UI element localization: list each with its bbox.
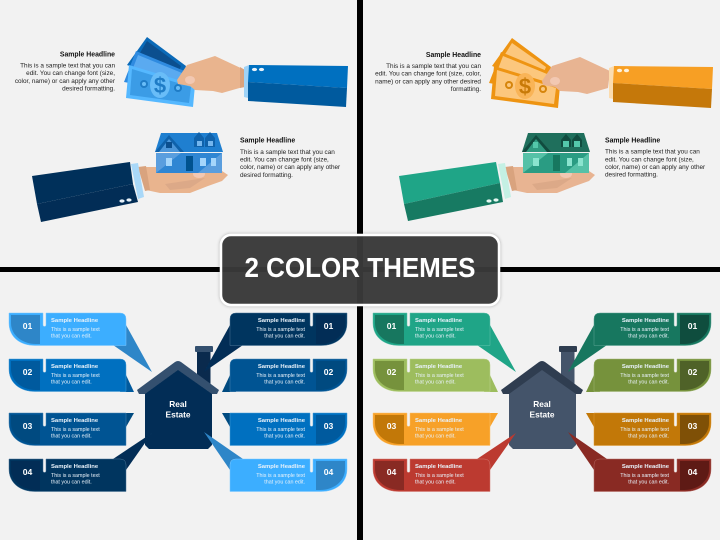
callout: red left 04: 04: [387, 467, 396, 477]
callout: dark green right 01: 01: [688, 321, 697, 331]
callout: orange left 03: This is a sample text: [415, 427, 464, 433]
callout: blue right 02: 02: [324, 367, 333, 377]
text block: blue house headline: color, name) or can apply any other: [240, 164, 341, 171]
diagram: blue real estate house: [137, 346, 219, 449]
text block: blue money headline: [15, 52, 116, 92]
callout: orange left 03: Sample Headline: [415, 418, 463, 424]
callout: light green left 02: Sample Headline: [415, 364, 463, 370]
text block: orange money headline: Sample Headline: [426, 52, 481, 59]
callout: blue left 02: This is a sample text: [51, 373, 100, 379]
callout: blue left 04: Sample Headline: [51, 464, 99, 470]
text block: blue money headline: edit. You can change font (size,: [26, 70, 115, 77]
callout: dark orange right 03: that you can edit.: [628, 434, 669, 440]
callout: dark green right 01: Sample Headline: [622, 318, 670, 324]
callout: blue left 02: that you can edit.: [51, 380, 92, 386]
text block: blue money headline: This is a sample text that you can: [20, 62, 115, 70]
callout: blue left 03: [9, 413, 134, 446]
callout: blue left 03: This is a sample text: [51, 427, 100, 433]
callout: orange left 03: 03: [387, 421, 396, 431]
callout: olive right 02: This is a sample text: [620, 373, 670, 379]
text block: green house headline: [605, 138, 706, 179]
icon: blue hand holding house: [32, 132, 228, 222]
callout: orange left 03: [373, 413, 498, 446]
diagram: blue real estate house: Real: [169, 399, 187, 409]
callout: green left 01: 01: [387, 321, 396, 331]
callout: olive right 02: 02: [688, 367, 697, 377]
callout: green left 01: [373, 313, 516, 372]
text block: orange money headline: [375, 52, 481, 93]
callout: dark green right 01: This is a sample text: [620, 327, 670, 333]
callout: dark orange right 03: 03: [688, 421, 697, 431]
callout: olive right 02: [586, 359, 711, 392]
text block: blue house headline: desired formatting.: [240, 172, 293, 179]
callout: dark red right 04: Sample Headline: [622, 464, 670, 470]
callout: blue left 04: 04: [23, 467, 32, 477]
diagram: multicolor real estate house: Real: [533, 399, 551, 409]
callout: blue left 02: 02: [23, 367, 32, 377]
text block: green house headline: desired formatting.: [605, 172, 658, 179]
callout: green left 01: This is a sample text: [415, 327, 464, 333]
callout: green left 01: Sample Headline: [415, 318, 463, 324]
callout: blue left 02: Sample Headline: [51, 364, 99, 370]
callout: blue right 04: Sample Headline: [258, 464, 306, 470]
text block: orange money headline: formatting.: [451, 86, 481, 93]
callout: blue left 03: Sample Headline: [51, 418, 99, 424]
callout: blue left 04: This is a sample text: [51, 473, 100, 479]
callout: blue right 02: that you can edit.: [264, 380, 305, 386]
callout: dark green right 01: that you can edit.: [628, 334, 669, 340]
text block: blue house headline: edit. You can change font (size,: [240, 156, 329, 164]
callout: blue left 01: This is a sample text: [51, 327, 100, 333]
icon: blue hand giving money: $: [154, 73, 166, 98]
callout: blue right 01: [204, 313, 347, 372]
callout: blue left 02: [9, 359, 134, 392]
callout: dark green right 01: [568, 313, 711, 372]
callout: dark red right 04: [568, 432, 711, 492]
callout: light green left 02: This is a sample text: [415, 373, 464, 379]
callout: blue left 03: that you can edit.: [51, 434, 92, 440]
callout: dark orange right 03: [586, 413, 711, 446]
callout: red left 04: that you can edit.: [415, 480, 456, 486]
callout: blue right 04: 04: [324, 467, 333, 477]
banner: 2 color themes: 2 COLOR THEMES: [244, 252, 476, 283]
callout: dark red right 04: 04: [688, 467, 697, 477]
callout: green left 01: that you can edit.: [415, 334, 456, 340]
callout: blue right 03: This is a sample text: [256, 427, 306, 433]
callout: blue left 04: [9, 433, 152, 492]
diagram: multicolor real estate house: [501, 346, 583, 449]
diagram: blue real estate house: Estate: [166, 410, 191, 420]
callout: blue right 04: that you can edit.: [264, 480, 305, 486]
callout: red left 04: [373, 433, 516, 492]
text block: blue house headline: This is a sample text that you can: [240, 149, 335, 156]
text block: green house headline: color, name) or can apply any other: [605, 164, 706, 171]
callout: blue right 03: 03: [324, 421, 333, 431]
icon: green hand holding house: [399, 133, 595, 221]
callout: orange left 03: that you can edit.: [415, 434, 456, 440]
text block: blue house headline: Sample Headline: [240, 138, 295, 144]
text block: orange money headline: edit. You can change font (size, color,: [375, 71, 481, 78]
text block: orange money headline: name) or can apply any other desired: [375, 78, 481, 85]
callout: blue right 03: that you can edit.: [264, 434, 305, 440]
callout: light green left 02: that you can edit.: [415, 380, 456, 386]
icon: orange hand giving money: $: [519, 74, 531, 99]
callout: blue right 02: Sample Headline: [258, 364, 306, 370]
callout: blue left 03: 03: [23, 421, 32, 431]
callout: dark orange right 03: Sample Headline: [622, 418, 670, 424]
text block: orange money headline: This is a sample text that you can: [386, 63, 481, 70]
callout: blue right 03: [222, 413, 347, 446]
callout: light green left 02: [373, 359, 498, 392]
callout: blue right 03: Sample Headline: [258, 418, 306, 424]
callout: blue right 01: Sample Headline: [258, 318, 306, 324]
callout: dark red right 04: This is a sample text: [620, 473, 670, 479]
callout: blue left 01: 01: [23, 321, 32, 331]
text block: blue money headline: Sample Headline: [60, 52, 115, 58]
icon: orange hand giving money: [489, 38, 713, 108]
callout: olive right 02: that you can edit.: [628, 380, 669, 386]
text block: green house headline: This is a sample text that you can: [605, 149, 700, 156]
callout: dark red right 04: that you can edit.: [628, 480, 669, 486]
callout: blue left 04: that you can edit.: [51, 480, 92, 486]
callout: blue left 01: that you can edit.: [51, 334, 92, 340]
icon: blue hand giving money: [124, 37, 348, 107]
callout: blue right 04: [204, 432, 347, 492]
callout: blue right 04: This is a sample text: [256, 473, 306, 479]
text block: blue money headline: desired formatting.: [62, 86, 115, 92]
callout: blue right 02: This is a sample text: [256, 373, 306, 379]
callout: blue left 01: Sample Headline: [51, 318, 99, 324]
text block: blue house headline: [240, 138, 341, 179]
callout: red left 04: Sample Headline: [415, 464, 463, 470]
text block: green house headline: Sample Headline: [605, 138, 660, 144]
banner: 2 color themes: [221, 235, 499, 305]
callout: olive right 02: Sample Headline: [622, 364, 670, 370]
callout: blue right 01: that you can edit.: [264, 334, 305, 340]
text block: green house headline: edit. You can change font (size,: [605, 156, 694, 163]
text block: blue money headline: color, name) or can apply any other: [15, 78, 116, 85]
callout: light green left 02: 02: [387, 367, 396, 377]
callout: blue left 01: [9, 313, 152, 372]
callout: blue right 01: This is a sample text: [256, 327, 306, 333]
callout: blue right 02: [222, 359, 347, 392]
callout: red left 04: This is a sample text: [415, 473, 464, 479]
callout: dark orange right 03: This is a sample text: [620, 427, 670, 433]
callout: blue right 01: 01: [324, 321, 333, 331]
diagram: multicolor real estate house: Estate: [530, 410, 555, 420]
